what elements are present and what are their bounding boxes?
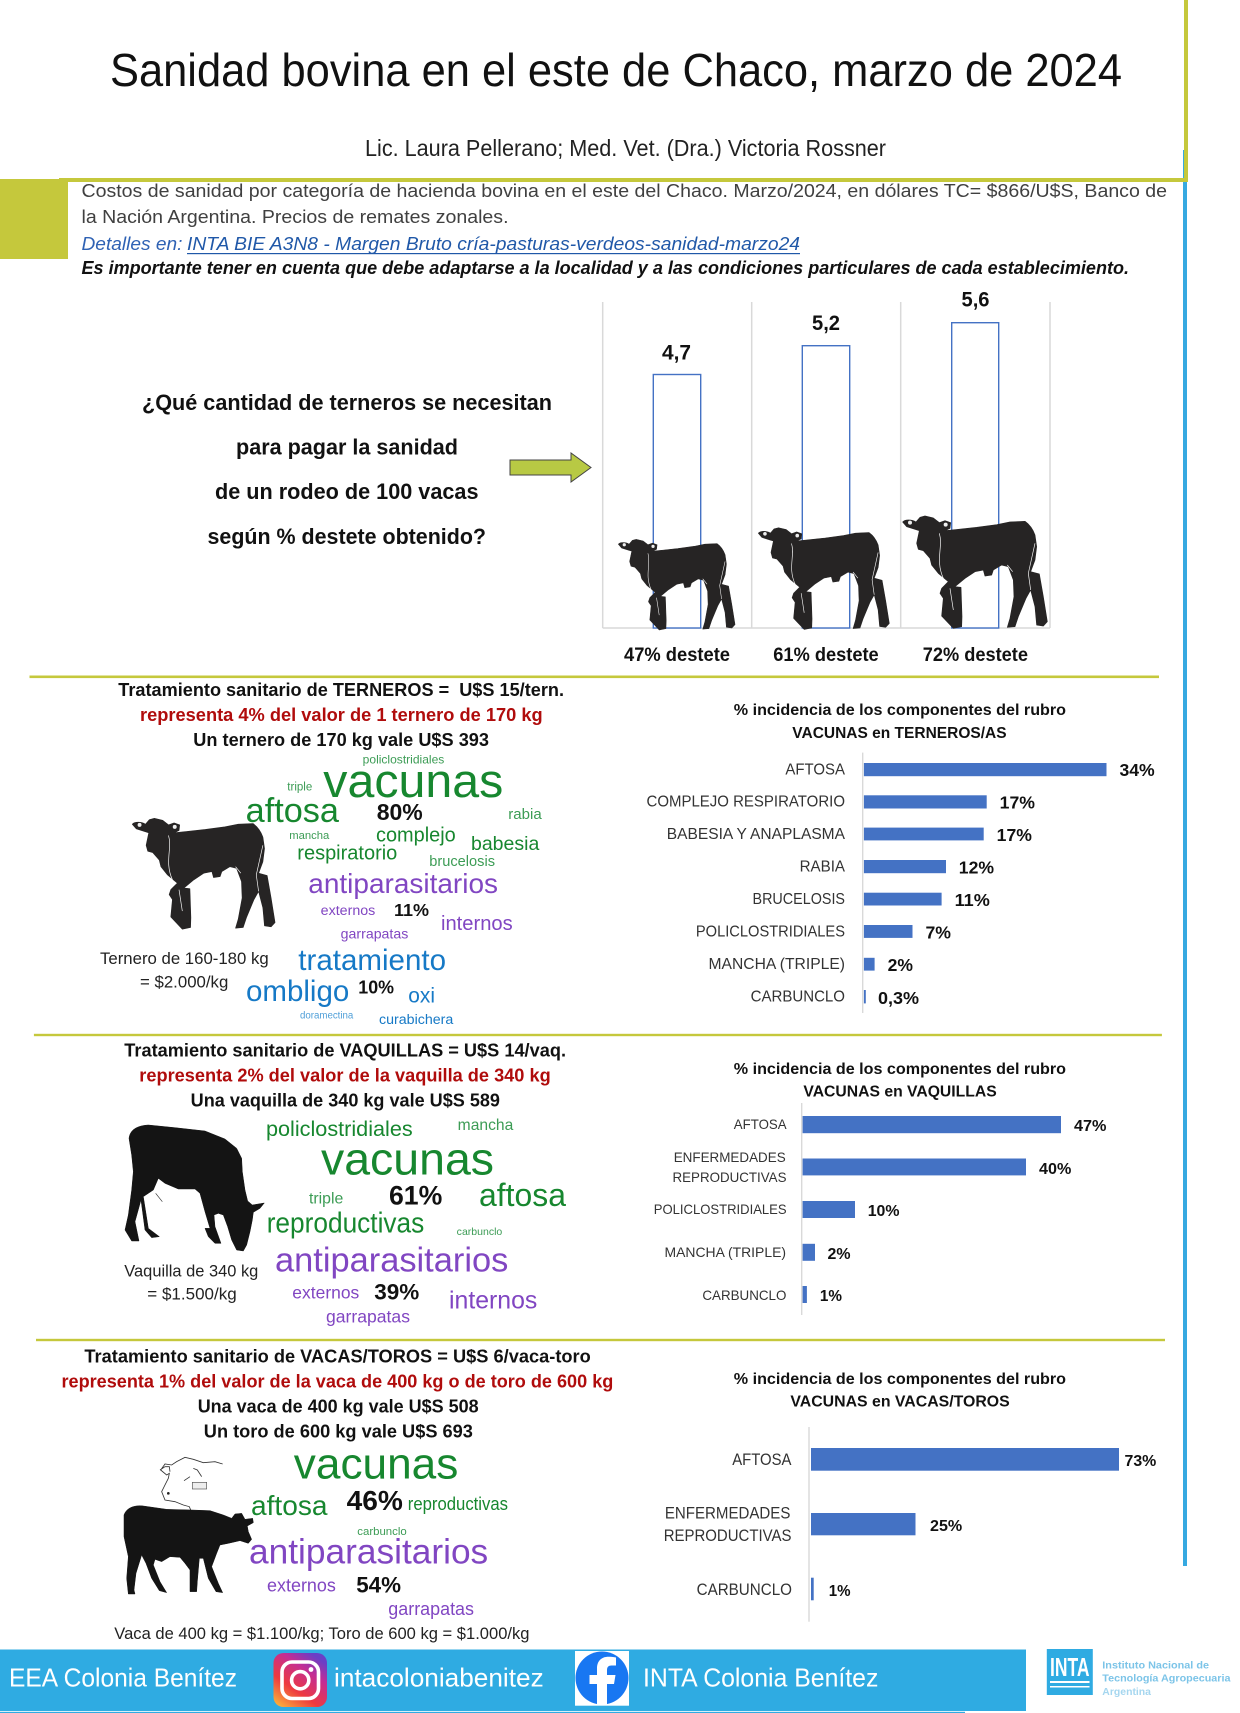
chart: terneros por % destete: 5,2 [812,312,840,335]
heading: vacas y toros: Tratamiento sanitario de VACAS/TOROS = U$S 6/vaca-toro [84,1347,591,1367]
category labels: REPRODUCTIVAS [664,1527,792,1545]
chart title [734,1061,1066,1101]
chart title [734,702,1066,742]
logo: INTA: Argentina [1102,1686,1151,1698]
footer text: EEA: EEA Colonia Benítez [9,1663,237,1693]
footer text: instagram handle: intacoloniabenitez [334,1663,544,1693]
word cloud: terneros: 80% [377,799,423,825]
icon: calf 3 [903,516,1047,628]
value labels [820,1118,1106,1305]
category labels: POLICLOSTRIDIALES [696,924,845,941]
value labels [829,1453,1156,1600]
chart title: VACUNAS en VACAS/TOROS [790,1394,1010,1411]
value labels: 40% [1039,1161,1071,1178]
word cloud: vacas y toros: reproductivas [408,1494,508,1514]
word cloud: vaquillas: aftosa [479,1177,566,1213]
word cloud: terneros: tratamiento [298,944,446,977]
heading: terneros [118,680,564,750]
chart: terneros por % destete: 61% destete [773,645,879,666]
chart title: % incidencia de los componentes del rubro [734,1371,1066,1388]
category labels: ENFERMEDADES [674,1149,786,1165]
category labels: COMPLEJO RESPIRATORIO [646,794,845,810]
word cloud: terneros: complejo [376,824,456,846]
word cloud: terneros: curabichera [379,1012,453,1028]
logo: INTA: Tecnología Agropecuaria [1102,1673,1231,1685]
value labels: 17% [997,825,1032,845]
bars [864,763,1106,1003]
category labels: POLICLOSTRIDIALES [654,1201,787,1217]
bar chart: vacunas en terneros [646,702,1155,1013]
chart title: VACUNAS en TERNEROS/AS [792,725,1007,742]
icon: instagram [274,1653,327,1707]
value labels: 1% [820,1288,842,1305]
price note: ternero [100,949,269,991]
icon: facebook [575,1651,629,1706]
word cloud: terneros: babesia [471,833,539,855]
word cloud: terneros: externos [321,903,375,919]
word cloud: vaquillas: antiparasitarios [275,1242,508,1280]
word cloud: vaquillas: 61% [389,1180,442,1210]
bars [811,1448,1119,1600]
word cloud: vaquillas: policlostridiales [266,1116,413,1141]
heading: vacas y toros: representa 1% del valor de la vaca de 400 kg o de toro de 600 kg [62,1372,613,1392]
heading: terneros: Tratamiento sanitario de TERNEROS = U$S 15/tern. [118,680,564,700]
word cloud: vaquillas: triple [309,1190,344,1207]
category labels: AFTOSA [732,1451,792,1469]
category labels [646,762,846,1006]
footer bar [0,1650,1026,1713]
chart title: % incidencia de los componentes del rubro [734,1061,1066,1078]
question text [142,390,552,549]
icon: vaquilla pastando [125,1125,264,1251]
category labels: AFTOSA [785,762,846,778]
value labels: 10% [868,1203,900,1220]
word cloud: terneros: antiparasitarios [308,868,498,899]
word cloud: terneros: brucelosis [429,854,495,870]
word cloud: vaquillas: internos [449,1288,537,1314]
chart: terneros por % destete: 4,7 [662,341,691,364]
chart title [734,1371,1066,1411]
value labels: 2% [888,955,913,975]
heading: terneros: Un ternero de 170 kg vale U$S 393 [193,730,489,750]
value labels: 34% [1120,760,1155,780]
word cloud: vacas y toros [249,1440,508,1619]
category labels: MANCHA (TRIPLE) [664,1244,786,1260]
word cloud: vacas y toros: aftosa [251,1490,328,1521]
bar chart: vacunas en vaquillas [654,1061,1106,1315]
category labels: REPRODUCTIVAS [672,1169,786,1185]
category labels [664,1451,792,1599]
word cloud: terneros: mancha [289,830,330,842]
word cloud: vaquillas: vacunas [321,1134,494,1184]
question text: ¿Qué cantidad de terneros se necesitan [142,390,552,415]
category labels: BRUCELOSIS [752,891,845,908]
heading: vacas y toros [62,1347,613,1442]
value labels: 11% [955,890,990,910]
word cloud: terneros: garrapatas [341,925,408,941]
panel: vaquillas [124,1041,566,1327]
word cloud: terneros: oxi [408,985,435,1008]
word cloud: vaquillas: mancha [458,1117,514,1134]
heading: vaquillas: Tratamiento sanitario de VAQUILLAS = U$S 14/vaq. [124,1041,566,1061]
heading: vaquillas: Una vaquilla de 340 kg vale U$S 589 [191,1091,500,1111]
intro text block: Costos de sanidad por categoría de hacienda bovina en el este del Chaco. Marzo/2024, en dólares TC= $866/U$S, Banco de [82,180,1167,201]
word cloud: terneros: doramectina [300,1010,354,1021]
chart title: VACUNAS en VAQUILLAS [803,1084,997,1101]
value labels: 17% [1000,792,1035,812]
word cloud: vacas y toros: externos [267,1576,336,1596]
question text: de un rodeo de 100 vacas [215,479,478,504]
price note: vaquilla: Vaquilla de 340 kg [124,1262,258,1281]
word cloud: terneros: 10% [358,977,394,997]
value labels: 2% [828,1246,850,1263]
word cloud: terneros: respiratorio [297,842,397,864]
word cloud: vacas y toros: vacunas [294,1440,458,1488]
word cloud: terneros: triple [287,782,312,794]
arrow [510,453,591,482]
word cloud: vaquillas: carbunclo [457,1226,502,1238]
title: Sanidad bovina en el este de Chaco, marzo de 2024 [110,44,1122,96]
value labels: 47% [1074,1118,1106,1135]
word cloud: vacas y toros: 46% [347,1485,403,1516]
icon: calf 2 [758,528,889,629]
intro text block: Es importante tener en cuenta que debe adaptarse a la localidad y a las condiciones particulares de cada establecimiento. [82,258,1129,278]
price note: vaquilla [124,1262,258,1303]
logo: INTA: INTA [1050,1652,1090,1682]
olive corner square [0,179,68,259]
price note: vaquilla: = $1.500/kg [147,1284,237,1303]
category labels [654,1116,787,1303]
heading: vacas y toros: Un toro de 600 kg vale U$S 693 [204,1422,473,1442]
chart: terneros por % destete: 72% destete [923,645,1028,666]
heading: vacas y toros: Una vaca de 400 kg vale U$S 508 [198,1397,479,1417]
panel: terneros [100,680,564,1028]
word cloud: terneros [246,752,542,1028]
word cloud: vacas y toros: garrapatas [388,1599,474,1619]
word cloud: terneros: aftosa [246,792,339,830]
question text: según % destete obtenido? [208,524,486,549]
bar chart: vacunas en vacas y toros [664,1371,1156,1622]
category labels: CARBUNCLO [751,989,845,1006]
logo: INTA: Instituto Nacional de [1102,1659,1209,1671]
category labels: RABIA [800,858,846,876]
word cloud: vaquillas: garrapatas [326,1307,410,1327]
word cloud: vaquillas [266,1116,566,1327]
heading: vaquillas: representa 2% del valor de la vaquilla de 340 kg [139,1066,551,1086]
word cloud: vaquillas: reproductivas [267,1208,424,1240]
value labels: 1% [829,1583,850,1600]
value labels: 73% [1124,1453,1156,1470]
intro text block: Detalles en: [82,233,182,254]
word cloud: vacas y toros: carbunclo [357,1526,407,1538]
value labels: 25% [930,1518,962,1535]
value labels [878,760,1155,1008]
word cloud: terneros: rabia [508,806,542,823]
word cloud: terneros: 11% [394,900,429,920]
chart: terneros por % destete [603,289,1050,666]
logo: INTA [1047,1649,1231,1698]
price note: ternero: Ternero de 160-180 kg [100,949,269,968]
value labels: 0,3% [878,988,919,1008]
footer text: facebook page: INTA Colonia Benítez [643,1663,878,1693]
icon: ternero [132,818,275,929]
word cloud: terneros: vacunas [323,755,503,808]
word cloud: terneros: internos [441,913,513,935]
category labels: AFTOSA [734,1116,787,1132]
price note: vaca y toro: Vaca de 400 kg = $1.100/kg; Toro de 600 kg = $1.000/kg [114,1624,530,1643]
heading: terneros: representa 4% del valor de 1 ternero de 170 kg [140,705,543,725]
bars [803,1116,1061,1303]
chart title: % incidencia de los componentes del rubro [734,702,1066,719]
word cloud: vaquillas: 39% [374,1279,419,1304]
chart: terneros por % destete: 47% destete [624,645,730,666]
word cloud: terneros: ombligo [246,975,349,1008]
price note: ternero: = $2.000/kg [140,972,228,991]
intro text block: INTA BIE A3N8 - Margen Bruto cría-pasturas-verdeos-sanidad-marzo24 [187,233,800,254]
word cloud: vacas y toros: 54% [356,1573,401,1598]
word cloud: vacas y toros: antiparasitarios [249,1532,488,1572]
intro text block [82,180,1167,278]
panel: vacas y toros [62,1347,613,1643]
value labels: 7% [926,923,951,943]
authors: Lic. Laura Pellerano; Med. Vet. (Dra.) Victoria Rossner [365,135,886,161]
icon: calf 1 [618,539,735,630]
word cloud: vaquillas: externos [292,1282,360,1302]
category labels: CARBUNCLO [697,1581,792,1599]
chart: terneros por % destete: 5,6 [962,289,990,312]
category labels: MANCHA (TRIPLE) [708,956,845,973]
value labels: 12% [959,858,994,878]
category labels: ENFERMEDADES [665,1504,790,1522]
word cloud: terneros: policlostridiales [363,752,444,766]
question text: para pagar la sanidad [236,434,458,460]
icon: vaca y toro [124,1457,253,1594]
category labels: CARBUNCLO [702,1287,787,1303]
intro text block: la Nación Argentina. Precios de remates zonales. [82,206,508,227]
heading: vaquillas [124,1041,566,1111]
category labels: BABESIA Y ANAPLASMA [667,826,846,843]
